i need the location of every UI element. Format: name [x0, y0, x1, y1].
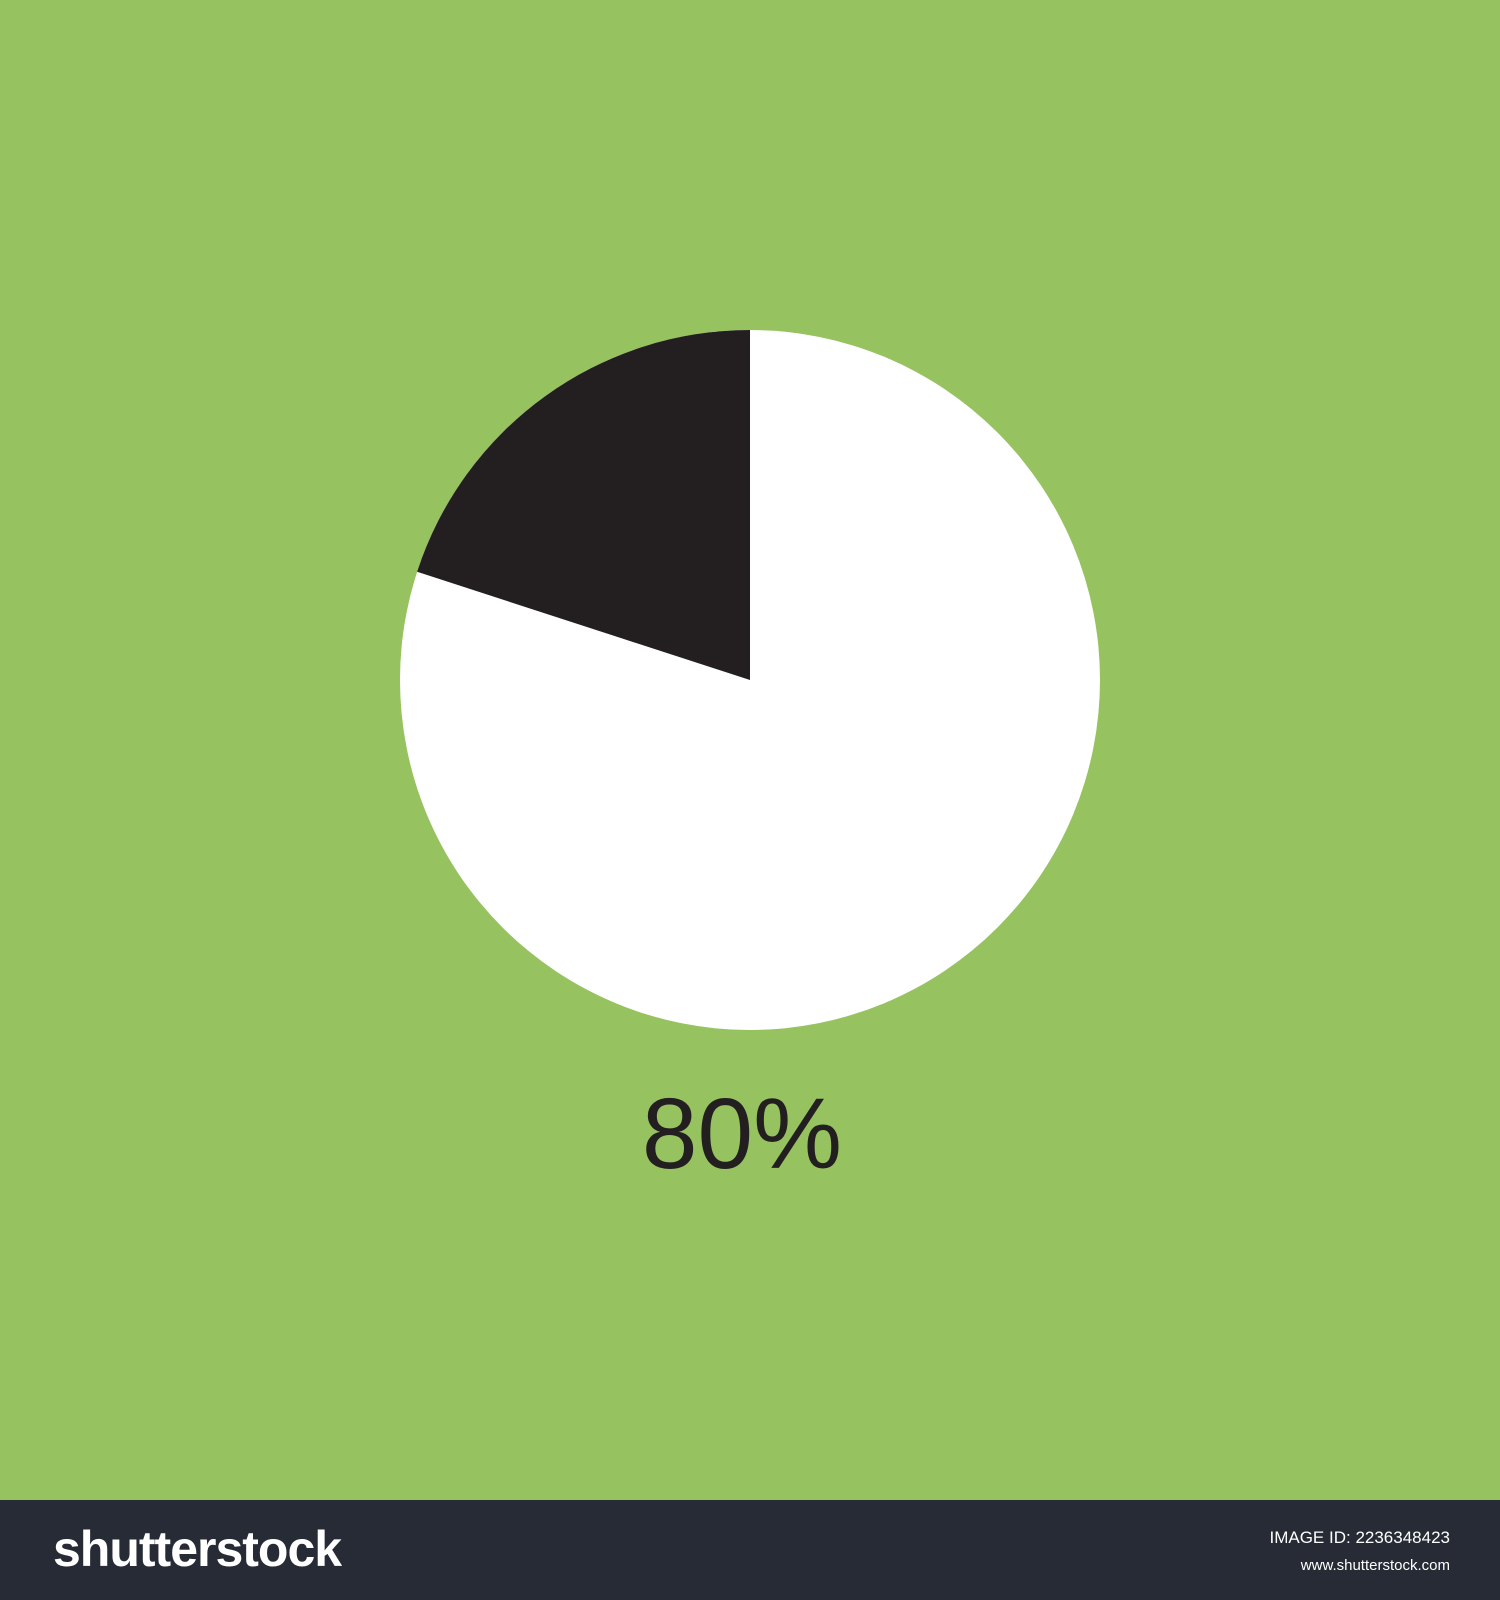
footer logo: shutterstock — [53, 1521, 341, 1577]
footer bar — [0, 1500, 1500, 1600]
pie slice: 80% white — [400, 330, 1100, 1030]
image id: IMAGE ID: 2236348423 — [1269, 1528, 1450, 1547]
pie slice: 20% black — [417, 330, 750, 680]
footer url: www.shutterstock.com — [1301, 1557, 1450, 1574]
percentage label: 80% — [642, 1078, 842, 1190]
